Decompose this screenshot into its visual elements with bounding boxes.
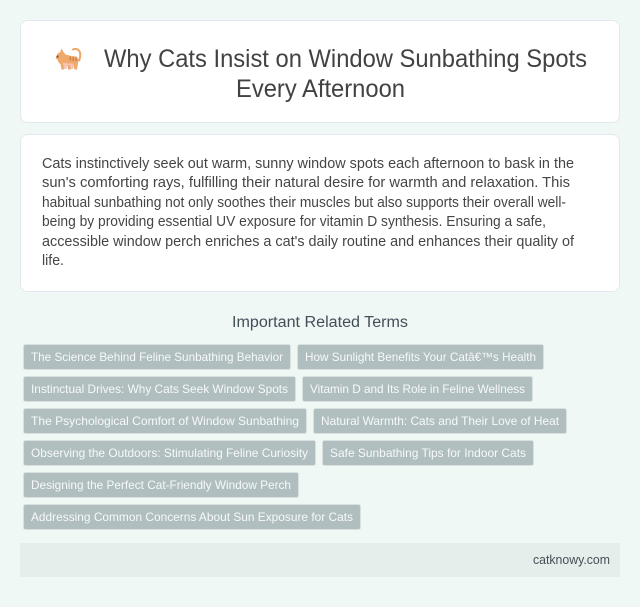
icon: cat <box>56 48 80 70</box>
panel: description: accessible window perch enriches a cat's daily routine and enhances their quality of <box>42 234 575 250</box>
panel: description: habitual sunbathing not only soothes their muscles but also supports their overall well- <box>42 195 566 211</box>
footer: catknowy.com <box>533 553 610 567</box>
panel: description: sun's comforting rays, fulfilling their natural desire for warmth and relaxation. This <box>42 175 570 191</box>
tags: related terms: Observing the Outdoors: Stimulating Feline Curiosity <box>31 446 308 460</box>
tags: related terms: Safe Sunbathing Tips for Indoor Cats <box>330 446 526 460</box>
tags: related terms: Vitamin D and Its Role in Feline Wellness <box>310 382 525 396</box>
tags: related terms: Natural Warmth: Cats and Their Love of Heat <box>321 414 560 428</box>
heading: related terms: Important Related Terms <box>232 314 408 331</box>
panel: description <box>20 134 620 292</box>
tags: related terms: The Science Behind Feline Sunbathing Behavior <box>31 350 283 364</box>
title: Every Afternoon <box>236 75 405 103</box>
panel: header <box>20 20 620 122</box>
tags: related terms: How Sunlight Benefits Your Catâ€™s Health <box>305 350 536 364</box>
tags: related terms: Instinctual Drives: Why Cats Seek Window Spots <box>31 382 288 396</box>
tags: related terms: The Psychological Comfort of Window Sunbathing <box>31 414 299 428</box>
panel: description: being by providing essential UV exposure for vitamin D synthesis. Ensuring a safe, <box>42 214 546 230</box>
title: Why Cats Insist on Window Sunbathing Spots <box>104 45 587 73</box>
title <box>104 45 587 103</box>
panel: description: Cats instinctively seek out warm, sunny window spots each afternoon to bask in the <box>42 156 574 172</box>
footer <box>20 543 620 577</box>
tags: related terms <box>24 344 566 530</box>
tags: related terms: Designing the Perfect Cat-Friendly Window Perch <box>31 478 291 492</box>
tags: related terms: Addressing Common Concerns About Sun Exposure for Cats <box>31 510 353 524</box>
panel: description: life. <box>42 253 64 269</box>
